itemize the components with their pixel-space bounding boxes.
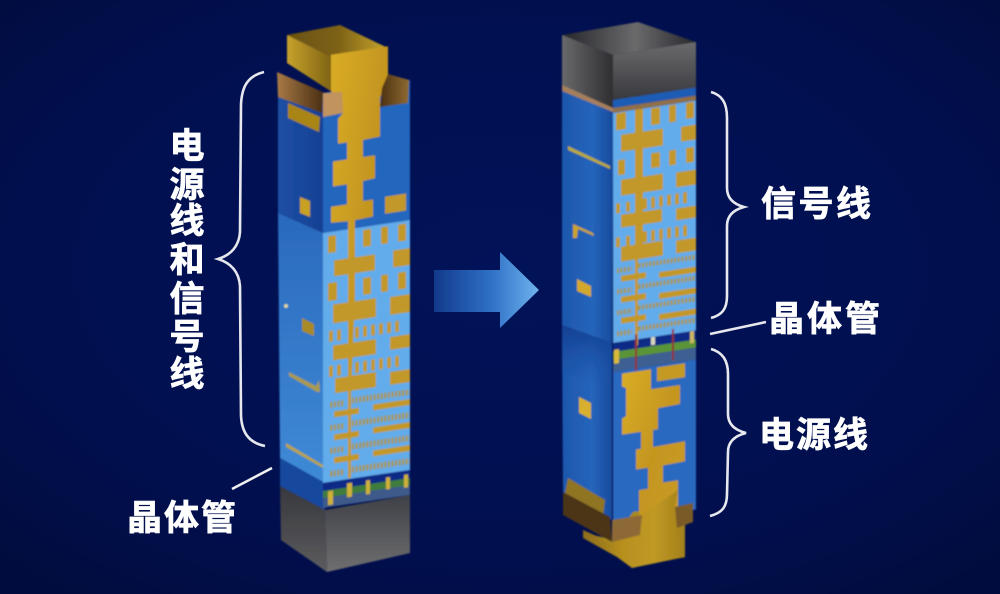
gold signal pattern (328, 193, 410, 464)
fine stripe rows (330, 389, 410, 477)
label: left transistor: 晶体管 (127, 499, 238, 538)
left face (278, 75, 325, 510)
left column: power and signal lines above transistor (277, 25, 410, 572)
left title: power and signal lines (169, 127, 205, 394)
bottom gold block (583, 490, 685, 568)
arrow (434, 252, 539, 328)
gold signal pattern (616, 101, 696, 349)
left title: power and signal lines: 信 (169, 280, 205, 319)
bottom gold base (583, 504, 685, 572)
label: right transistor: 晶体管 (769, 300, 883, 339)
gold top block (287, 25, 388, 92)
transistor pins (614, 326, 694, 374)
left title: power and signal lines: 和 (169, 241, 205, 280)
gray carrier top (562, 22, 696, 112)
leader line: left transistor (232, 468, 272, 489)
front face (323, 43, 410, 508)
left title: power and signal lines: 号 (169, 318, 205, 357)
left title: power and signal lines: 线 (169, 355, 205, 394)
transistor pins (328, 474, 408, 505)
right bracket: signal lines (711, 92, 744, 318)
gold power trunk (622, 364, 685, 539)
right bracket: power lines (710, 349, 746, 516)
right column: signal lines above, power lines below (562, 22, 696, 572)
gold power trunk (331, 46, 388, 481)
left title: power and signal lines: 电 (169, 127, 205, 166)
left face (562, 85, 613, 520)
fine stripe rows (617, 255, 696, 336)
gray silicon base (280, 486, 410, 572)
brown band (277, 72, 409, 132)
brown band (563, 478, 693, 542)
label: signal lines: 信号线 (761, 185, 874, 224)
front face (583, 88, 696, 573)
left title: power and signal lines: 线 (169, 202, 205, 241)
left title: power and signal lines: 源 (169, 166, 205, 205)
label: power lines: 电源线 (759, 416, 870, 455)
left bracket (218, 72, 265, 446)
leader line: right transistor (710, 322, 766, 334)
